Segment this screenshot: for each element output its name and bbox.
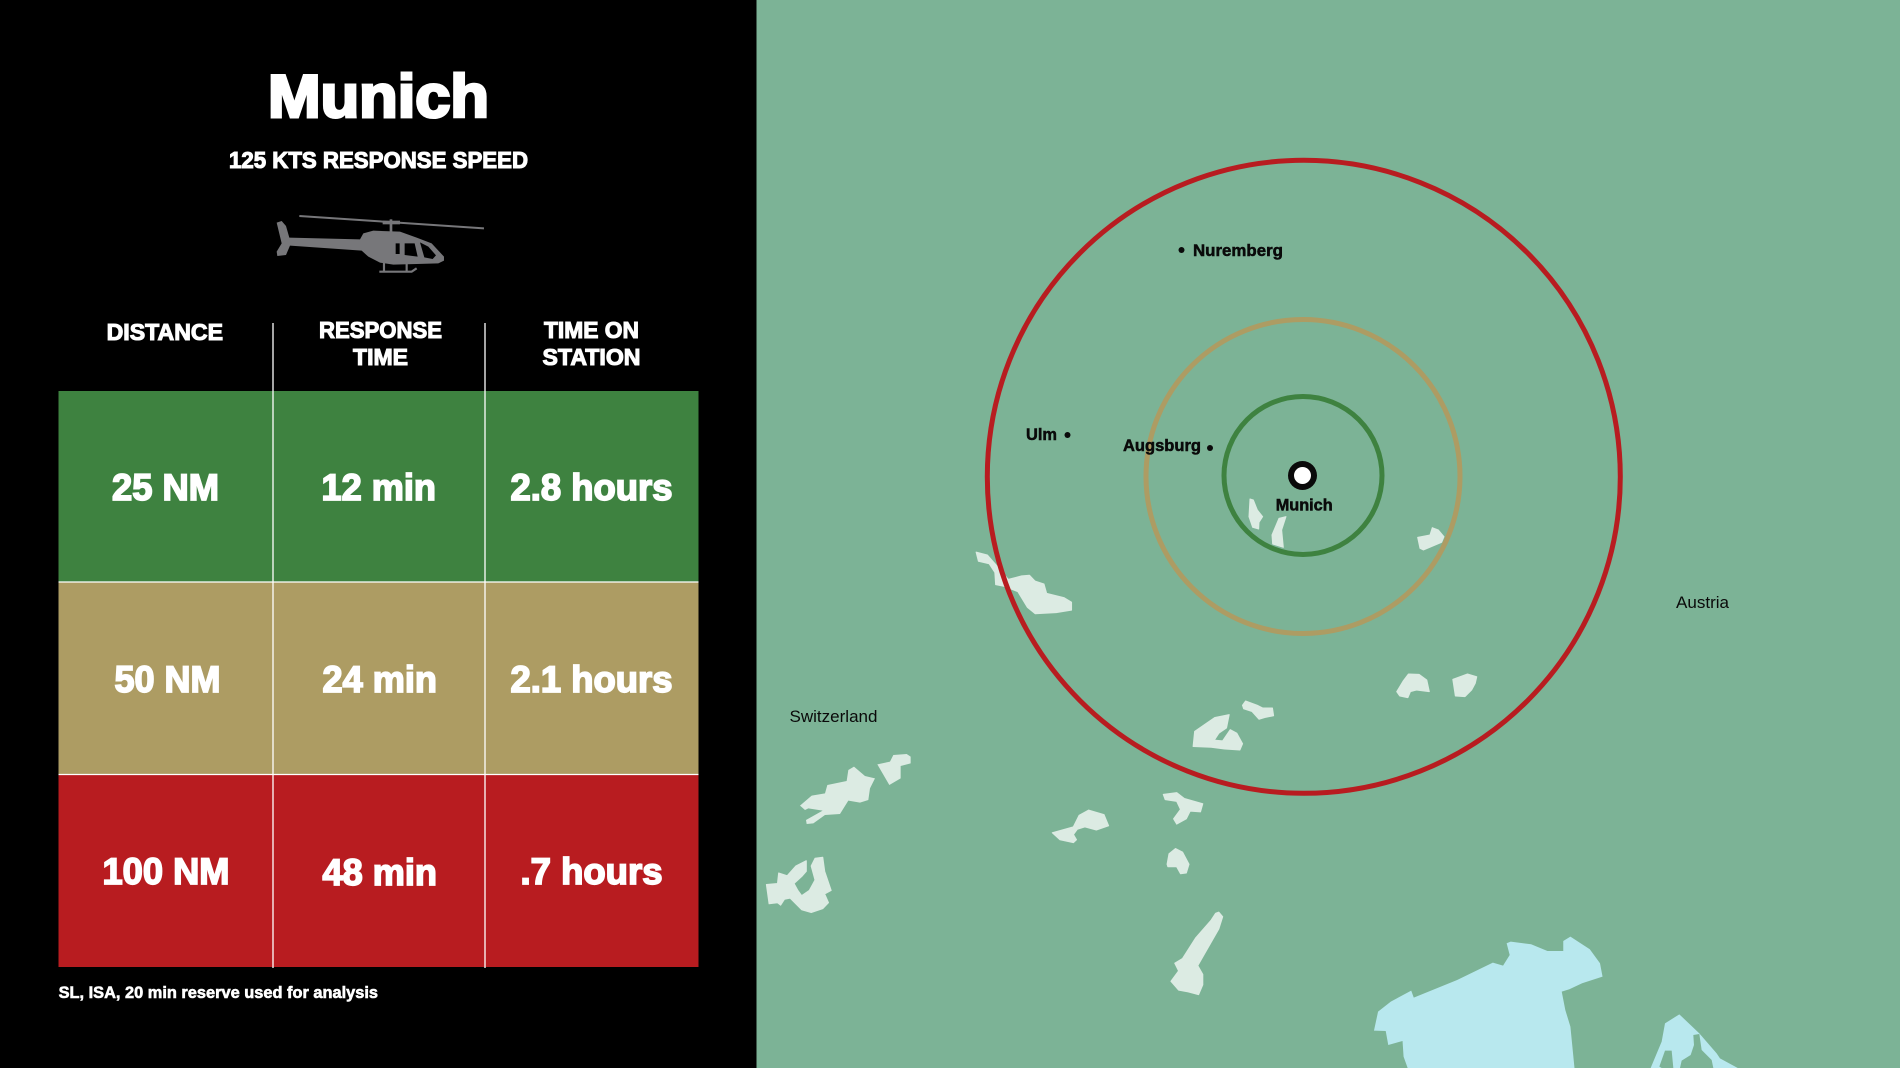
subtitle: 125 KTS RESPONSE SPEED: [229, 147, 528, 173]
large lake, south: [1374, 937, 1603, 1068]
city: Augsburg: Augsburg: [1123, 437, 1201, 455]
title: Munich: [268, 63, 489, 130]
values: 100 NM row: .7 hours: [520, 851, 662, 892]
city: Ulm: Ulm: [1026, 426, 1057, 444]
lake with island, south east corner: [1651, 1014, 1738, 1068]
column header: response time: TIME: [353, 344, 408, 370]
country label: Switzerland: Switzerland: [790, 707, 878, 726]
range ring: 50 NM: [1146, 320, 1460, 634]
values: 50 NM row: 50 NM: [114, 659, 220, 700]
values: 50 NM row: 2.1 hours: [510, 659, 672, 700]
values: 100 NM row: [102, 851, 662, 893]
row: 100 NM: [58, 774, 698, 967]
values: 50 NM row: [114, 659, 672, 700]
values: 25 NM row: 12 min: [322, 467, 436, 508]
values: 50 NM row: 24 min: [322, 659, 437, 700]
country label: Austria: Austria: [1676, 593, 1730, 612]
row: 50 NM: [58, 582, 698, 774]
column header: distance: DISTANCE: [107, 319, 223, 345]
icon: helicopter: [277, 216, 484, 272]
city: Nuremberg: Nuremberg: [1193, 242, 1283, 260]
small lakes near Munich: [1249, 499, 1444, 550]
row: 25 NM: [58, 391, 698, 582]
values: 25 NM row: 2.8 hours: [510, 467, 672, 508]
column header: response time: RESPONSE: [319, 317, 442, 343]
values: 25 NM row: 25 NM: [112, 467, 219, 508]
column header: time on station: TIME ON: [544, 317, 639, 343]
column header: time on station: [542, 317, 640, 370]
range ring: 25 NM: [1224, 396, 1382, 554]
values: 100 NM row: 48 min: [322, 852, 437, 893]
table rules: [58, 323, 698, 968]
values: 100 NM row: 100 NM: [102, 851, 230, 892]
table: response data: [58, 317, 698, 968]
city label: Munich: Munich: [1276, 497, 1333, 515]
panel: data sidebar: [0, 0, 756, 1068]
column header: response time: [319, 317, 442, 370]
values: 25 NM row: [112, 467, 672, 508]
marker: Munich base: [1288, 461, 1317, 490]
range ring: 100 NM: [987, 160, 1620, 793]
footnote: SL, ISA, 20 min reserve used for analysis: [59, 984, 378, 1002]
small lakes, south east: [1397, 674, 1477, 698]
column header: time on station: STATION: [542, 344, 640, 370]
lakes, Swiss pair: [800, 754, 911, 824]
panel: map: [756, 0, 1900, 1068]
small lakes, lower left of map: [766, 552, 1274, 995]
